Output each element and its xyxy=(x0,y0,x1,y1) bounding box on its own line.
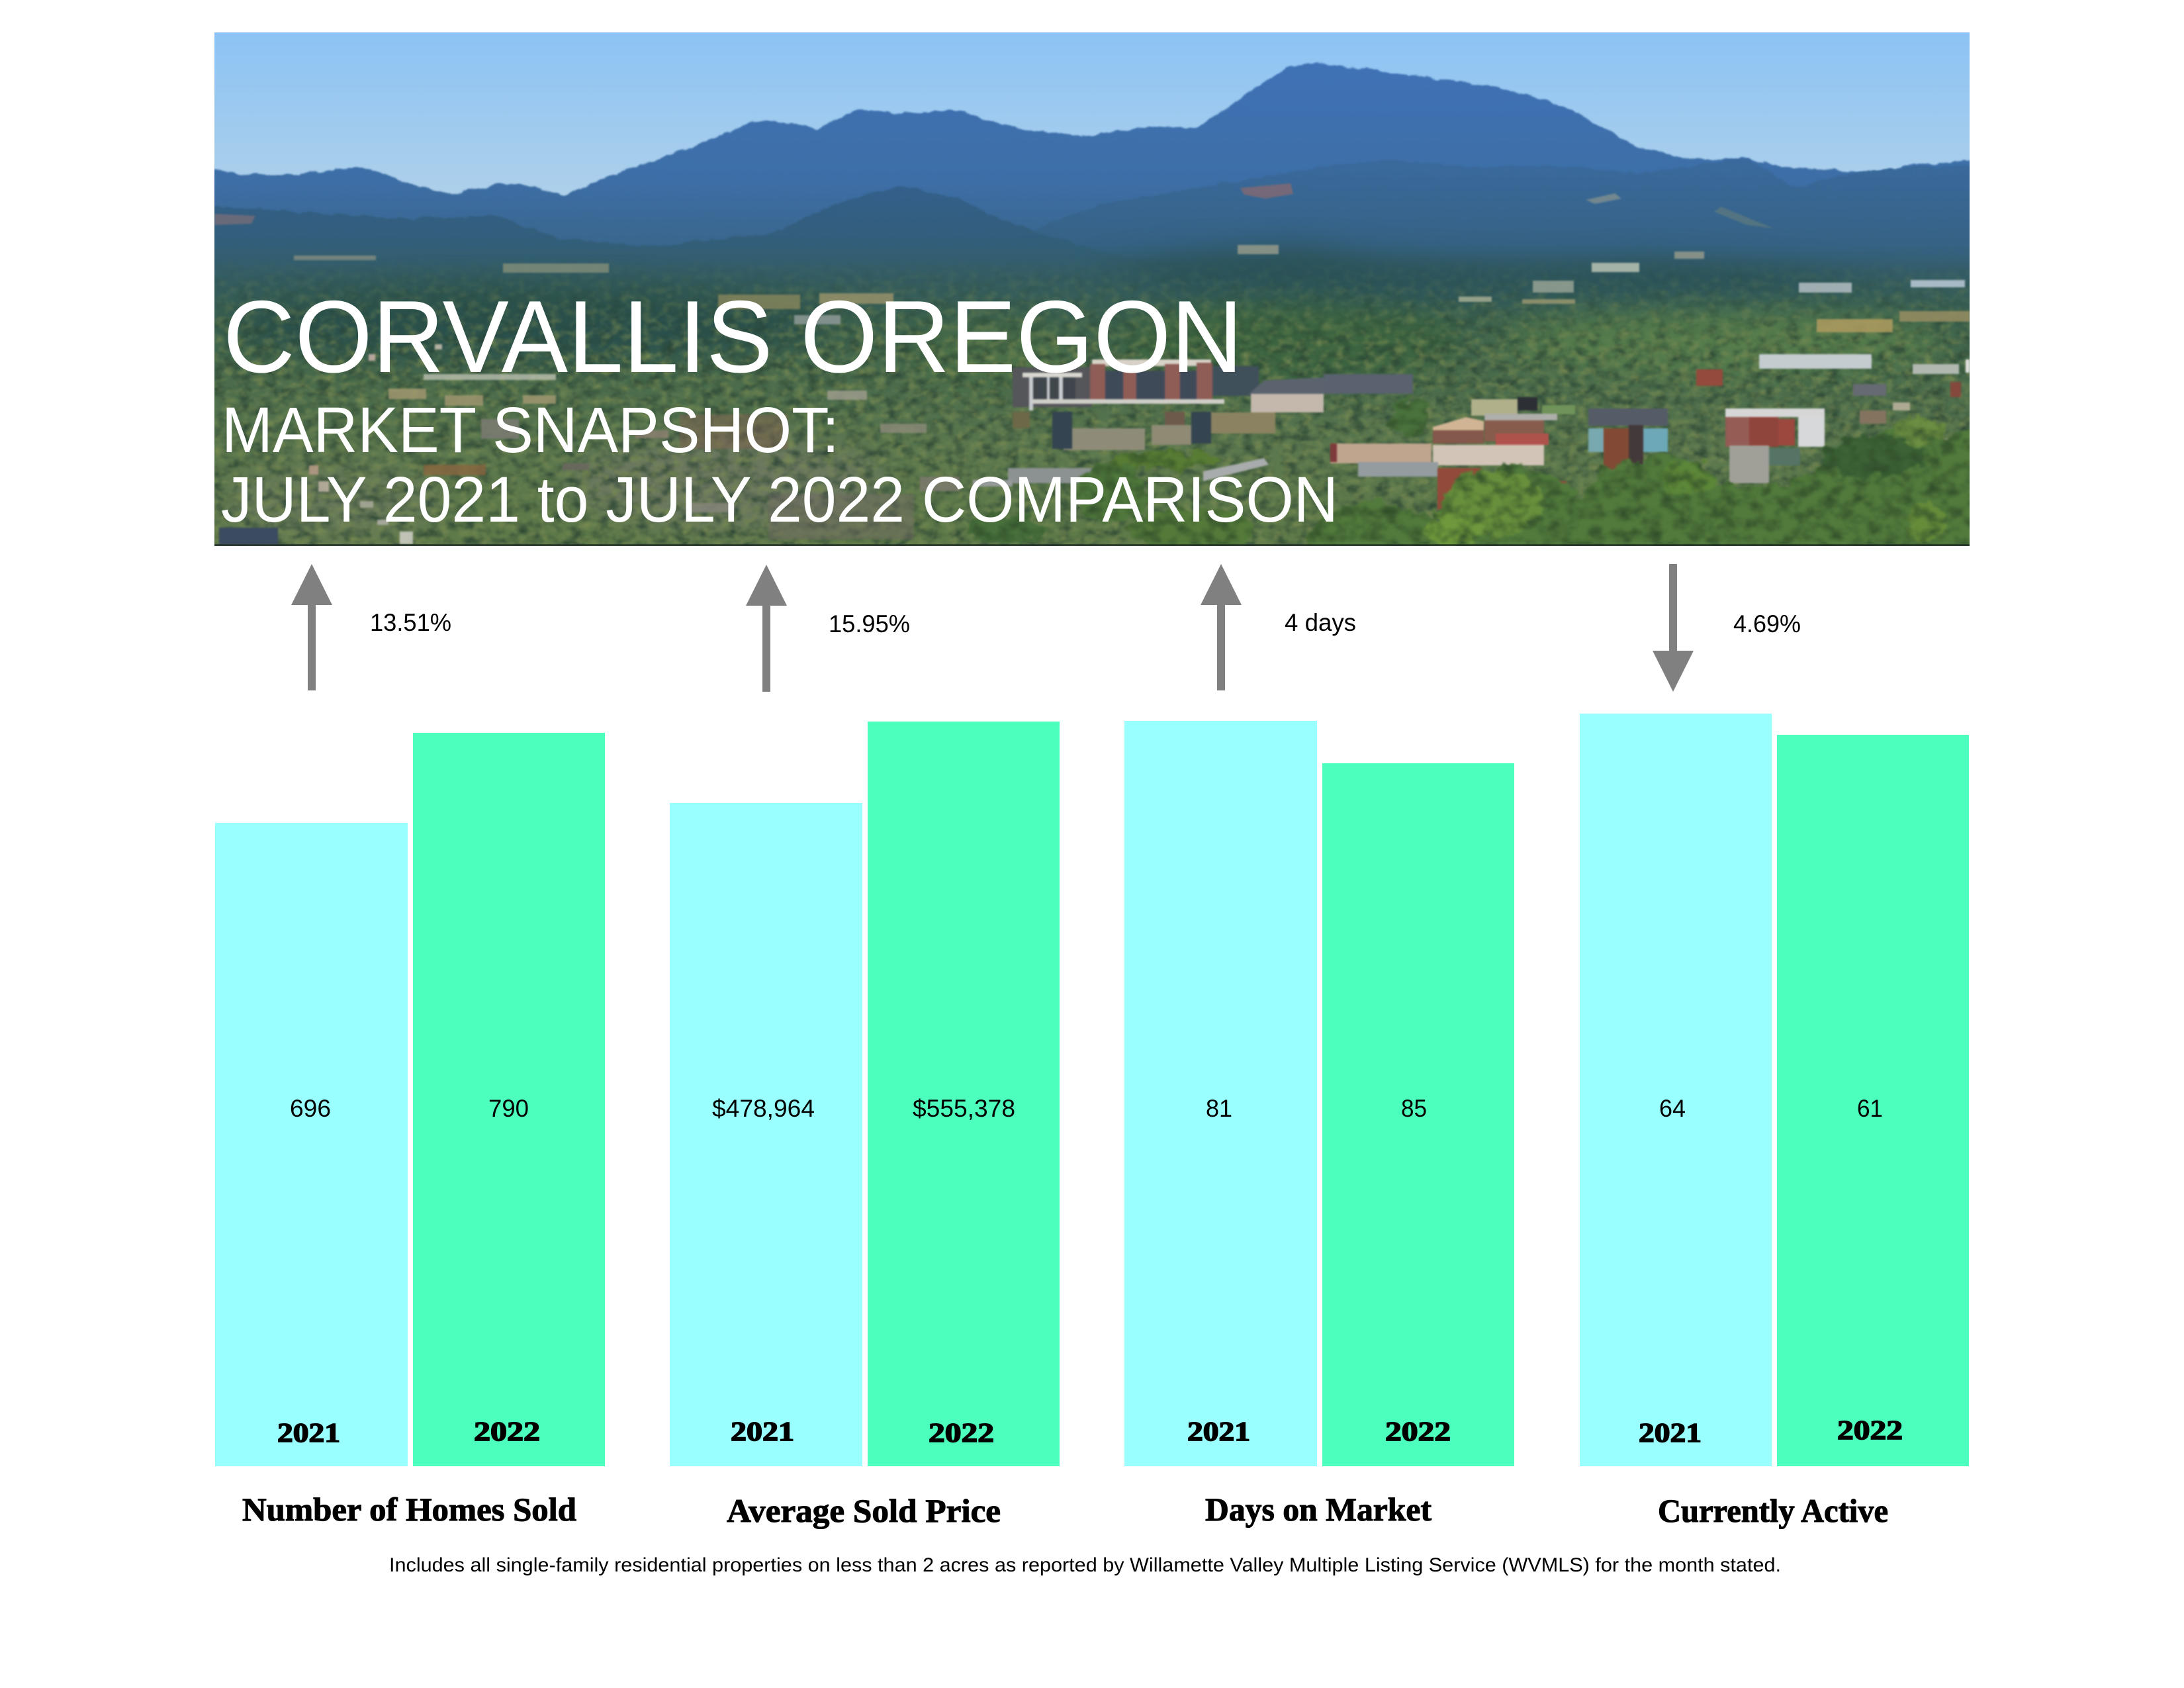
category label: Number of Homes Sold xyxy=(242,1491,576,1528)
title: CORVALLIS OREGON xyxy=(223,279,1243,394)
arrow down xyxy=(1653,564,1694,692)
year 2022: 2022 xyxy=(474,1416,540,1446)
photo fields and distant houses xyxy=(294,245,1970,544)
photo foreground trees xyxy=(966,397,1985,556)
value 2021: 81 xyxy=(1206,1095,1232,1122)
photo far mountains xyxy=(214,61,1970,248)
change label: 15.95% xyxy=(829,610,910,637)
panel: average sold price xyxy=(670,565,1060,1529)
value 2022: 61 xyxy=(1857,1095,1883,1122)
category label: Days on Market xyxy=(1205,1491,1432,1528)
panel: number of homes sold xyxy=(215,564,605,1528)
bar 2021 xyxy=(1580,714,1772,1466)
year 2021: 2021 xyxy=(731,1416,794,1446)
year 2022: 2022 xyxy=(1837,1415,1903,1445)
value 2021: 696 xyxy=(290,1095,331,1122)
category label: Currently Active xyxy=(1658,1492,1888,1529)
category label: Average Sold Price xyxy=(727,1492,1001,1529)
year 2022: 2022 xyxy=(929,1417,994,1448)
year 2021: 2021 xyxy=(1187,1416,1250,1446)
arrow up xyxy=(291,564,332,690)
year 2022: 2022 xyxy=(1385,1416,1451,1446)
photo clearcuts on hills xyxy=(214,183,1774,228)
change label: 13.51% xyxy=(370,609,451,636)
value 2022: 790 xyxy=(488,1095,529,1122)
value 2021: $478,964 xyxy=(712,1095,815,1122)
bar 2022 xyxy=(1777,735,1969,1466)
subtitle line two: JULY 2021 to JULY 2022 COMPARISON xyxy=(221,463,1338,536)
panel: days on market xyxy=(1124,564,1514,1528)
photo bottom edge xyxy=(214,544,1970,546)
arrow up xyxy=(1201,564,1242,690)
photo sky xyxy=(214,32,1970,197)
photo near hills xyxy=(214,186,1117,265)
bar 2021 xyxy=(215,823,408,1466)
bar 2022 xyxy=(868,722,1060,1466)
subtitle line one: MARKET SNAPSHOT: xyxy=(222,394,839,466)
photo foliage texture xyxy=(214,252,1970,546)
footnote: Includes all single-family residential properties on less than 2 acres as reported by Willamette Valley Multiple Listing Service (WVMLS) for the month stated. xyxy=(389,1554,1781,1576)
photo stadium and campus buildings xyxy=(219,354,1970,545)
bar 2022 xyxy=(413,733,605,1466)
panel: photo banner of Corvallis valley xyxy=(146,32,2038,556)
change label: 4.69% xyxy=(1733,610,1801,637)
infographic canvas xyxy=(214,32,1970,1575)
change label: 4 days xyxy=(1285,609,1356,636)
bar 2022 xyxy=(1322,763,1514,1466)
bar 2021 xyxy=(670,803,862,1466)
value 2022: 85 xyxy=(1401,1095,1427,1122)
year 2021: 2021 xyxy=(277,1417,340,1448)
bar 2021 xyxy=(1124,721,1317,1466)
value 2022: $555,378 xyxy=(913,1095,1015,1122)
year 2021: 2021 xyxy=(1639,1417,1702,1448)
photo middle ridge xyxy=(1034,159,1970,248)
panel: currently active xyxy=(1580,564,1969,1529)
photo tonal patches xyxy=(218,246,1946,539)
photo valley ground xyxy=(214,245,1970,546)
arrow up xyxy=(746,565,787,692)
value 2021: 64 xyxy=(1659,1095,1686,1122)
